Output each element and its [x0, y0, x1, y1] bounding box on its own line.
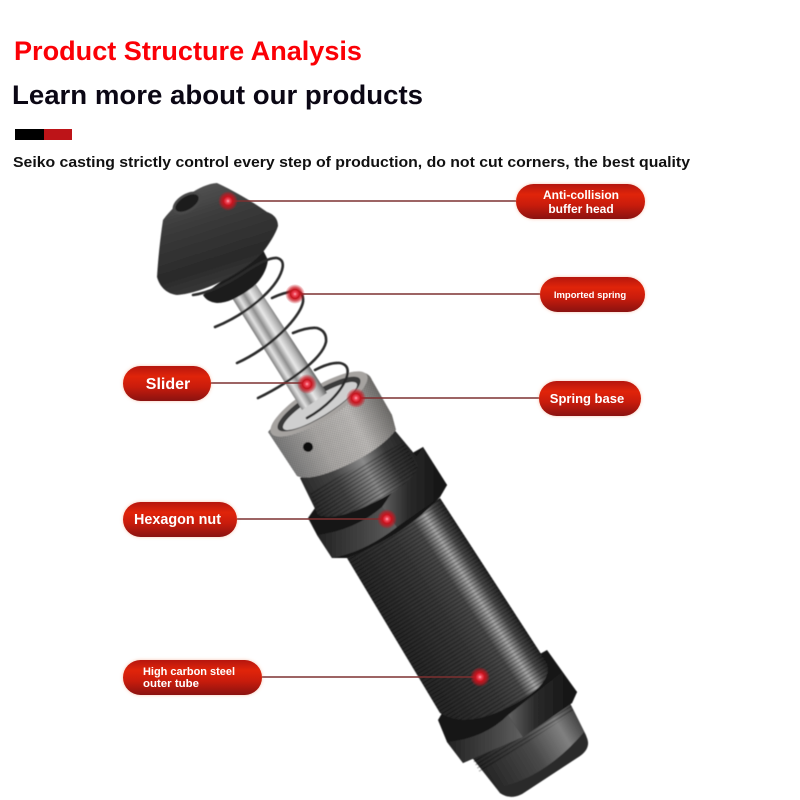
threaded end — [470, 695, 588, 797]
slider rod — [232, 280, 327, 410]
outer tube — [347, 498, 548, 720]
leader lines — [211, 201, 540, 677]
marker dots — [218, 191, 490, 687]
title: Product Structure Analysis — [14, 36, 362, 66]
label: hexagon nut — [123, 502, 237, 537]
label: imported spring — [540, 277, 645, 312]
label: high carbon steel outer tube — [123, 660, 262, 695]
label: high carbon steel outer tube: outer tube — [143, 678, 199, 690]
subtitle: Learn more about our products — [12, 80, 423, 110]
label: slider: Slider — [146, 376, 190, 393]
upper nut — [308, 447, 447, 558]
label: imported spring: Imported spring — [554, 290, 626, 301]
accent bar — [15, 129, 72, 140]
label: anti-collision buffer head: buffer head — [548, 202, 614, 216]
label: anti-collision buffer head — [516, 184, 645, 219]
neck cylinder — [300, 427, 418, 517]
knurled spring base — [262, 360, 396, 478]
lower nut — [438, 650, 577, 763]
label: spring base — [539, 381, 641, 416]
imported spring — [193, 258, 348, 418]
label: hexagon nut: Hexagon nut — [134, 512, 221, 528]
label: slider — [123, 366, 211, 401]
description: Seiko casting strictly control every step of production, do not cut corners, the best quality — [13, 154, 691, 171]
label: spring base: Spring base — [550, 391, 624, 406]
product: hydraulic shock absorber — [157, 183, 588, 797]
label: high carbon steel outer tube: High carbon steel — [143, 666, 235, 678]
label: anti-collision buffer head: Anti-collision — [543, 188, 619, 202]
buffer head — [157, 183, 278, 303]
